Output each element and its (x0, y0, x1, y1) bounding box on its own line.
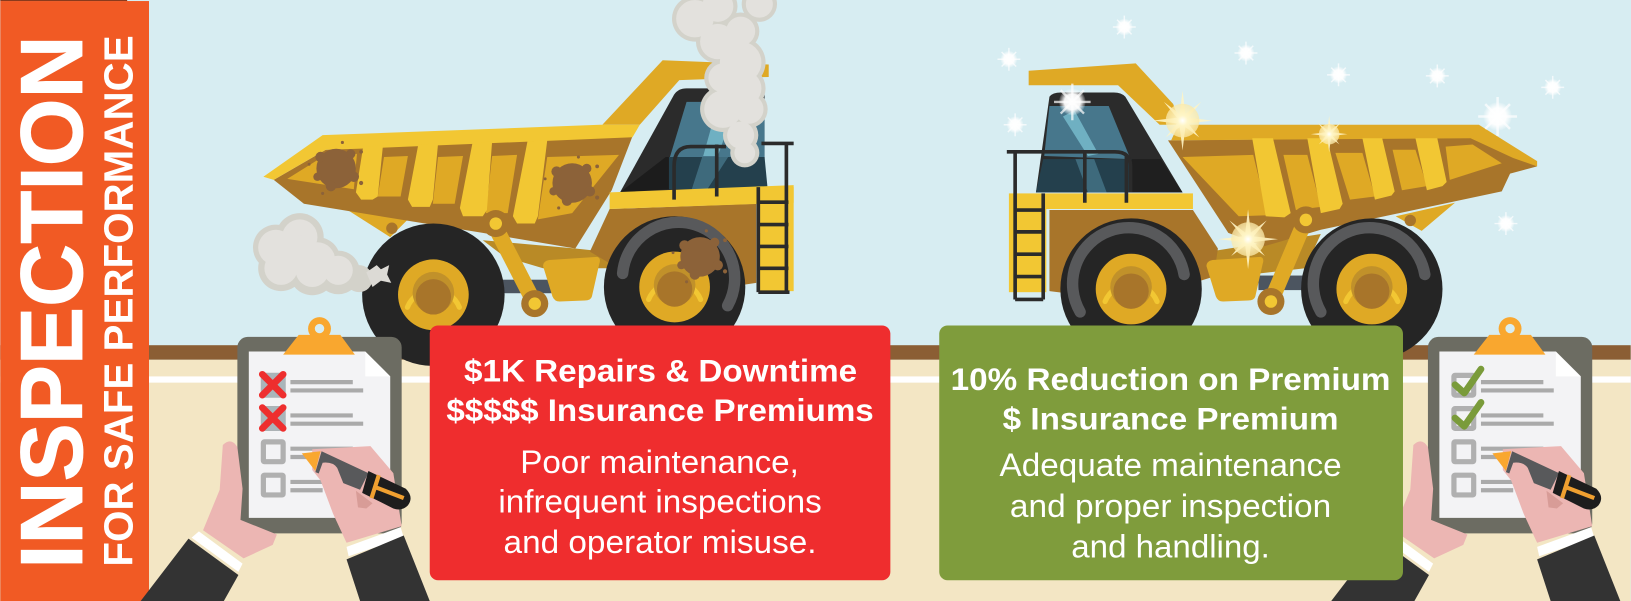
rear wheel (362, 224, 505, 366)
canopy (602, 60, 769, 125)
hoist arm (482, 210, 548, 317)
left clipboard with crosses (141, 317, 430, 601)
front wheel (1060, 218, 1202, 360)
red callout: and operator misuse. (504, 524, 817, 560)
subtitle: FOR SAFE PERFORMANCE (95, 35, 141, 567)
dump bed (263, 125, 640, 249)
red callout: $$$$$ Insurance Premiums (446, 393, 874, 428)
background: sky (0, 0, 1631, 346)
rear bracket (348, 210, 408, 237)
red callout (430, 325, 890, 580)
red callout: infrequent inspections (498, 484, 822, 520)
cost heading: $1K Repairs & Downtime (464, 354, 857, 389)
clean dump truck (997, 16, 1564, 360)
dust cloud (253, 213, 391, 295)
exhaust smoke from stack (672, 0, 777, 167)
railing and ladder (1007, 152, 1131, 299)
hands with pen (141, 441, 430, 601)
ground (0, 360, 1631, 601)
chassis (483, 240, 614, 268)
hands with pen (1331, 441, 1620, 601)
canopy (1029, 63, 1180, 125)
ground band (0, 345, 1631, 360)
sparkles (997, 16, 1564, 269)
hydraulic tank (1206, 257, 1263, 302)
green checks (1455, 369, 1481, 426)
rear wheel (1301, 218, 1442, 360)
savings heading: 10% Reduction on Premium (951, 362, 1391, 397)
body and deck (1009, 193, 1218, 302)
green callout: $ Insurance Premium (1003, 401, 1339, 436)
main title: INSPECTION (2, 35, 101, 569)
cause text: Poor maintenance, (520, 444, 799, 480)
hydraulic tank (543, 257, 600, 302)
green callout: and handling. (1071, 528, 1270, 564)
benefit text: Adequate maintenance (1000, 447, 1342, 483)
right clipboard with checkmarks (1331, 317, 1620, 601)
cab (1036, 93, 1183, 192)
dirty dump truck (253, 0, 794, 366)
green callout (939, 325, 1403, 580)
rear bracket (1396, 203, 1455, 231)
dump bed (1168, 125, 1537, 246)
title panel (0, 0, 149, 601)
green callout: and proper inspection (1010, 488, 1331, 524)
hoist arm (1257, 206, 1319, 315)
front wheel (604, 216, 745, 358)
railing and ladder (674, 143, 794, 292)
marked boxes (261, 373, 285, 430)
chassis (1196, 234, 1321, 279)
mud splatters (308, 141, 727, 283)
axle (499, 280, 551, 293)
red crosses (262, 374, 283, 428)
body and deck (590, 185, 794, 296)
cab (620, 88, 768, 192)
road line (0, 376, 1631, 383)
axle (1258, 276, 1305, 290)
